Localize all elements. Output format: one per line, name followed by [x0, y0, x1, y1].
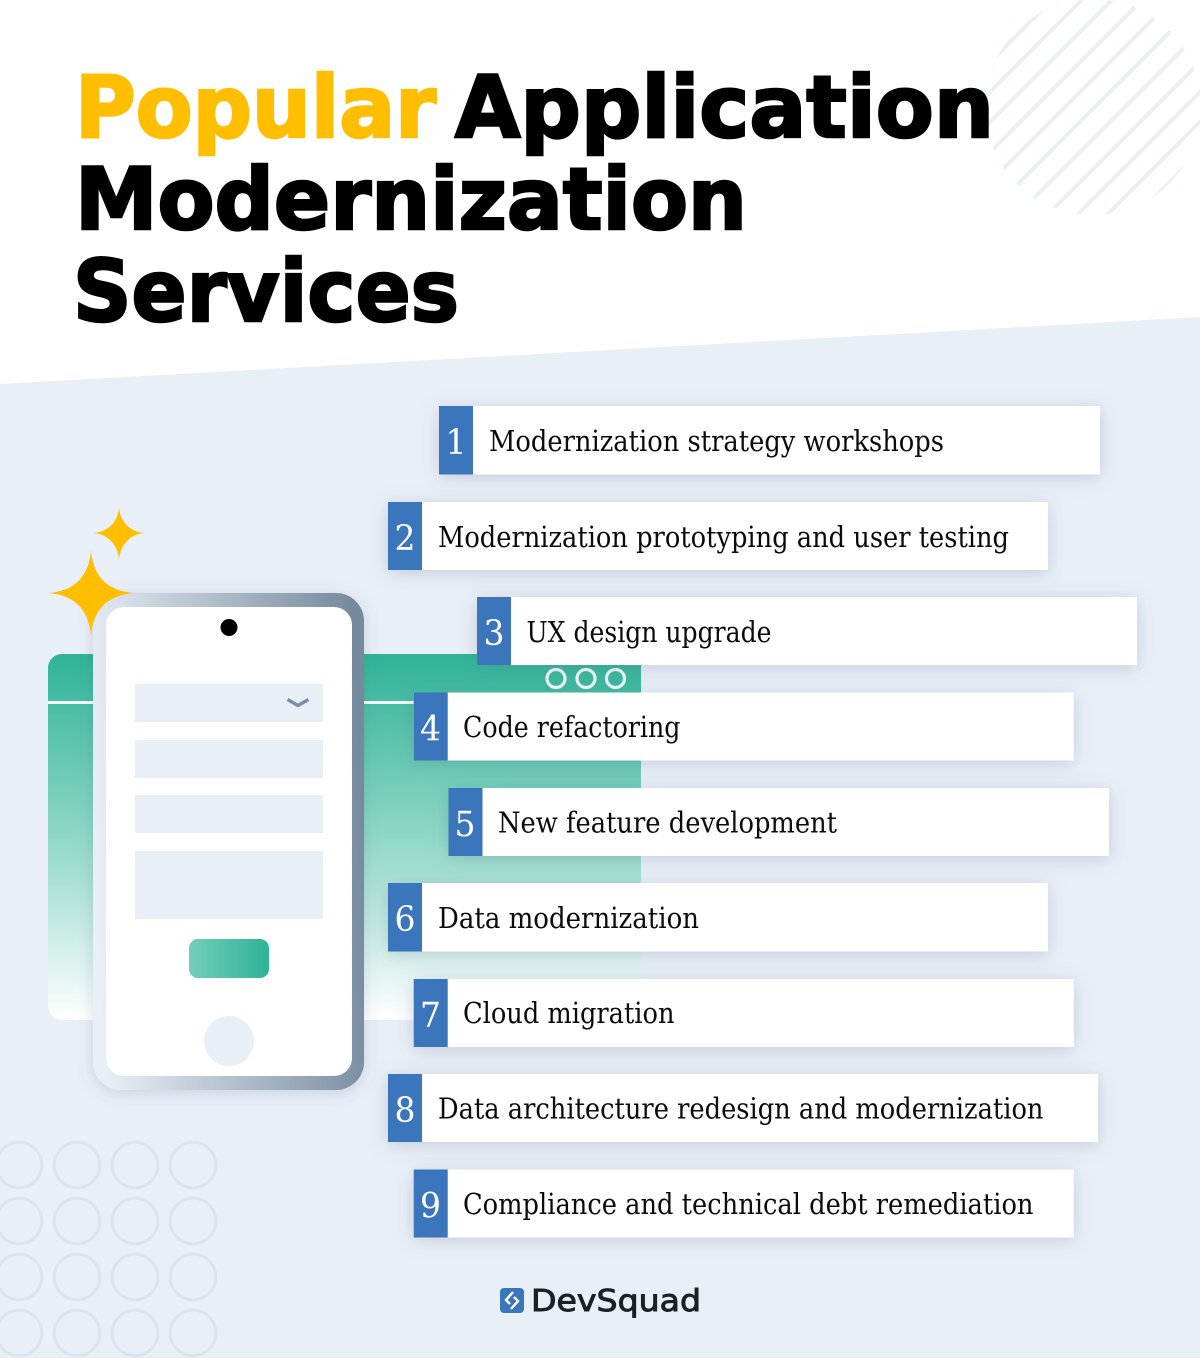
- list item 2: [388, 502, 1048, 570]
- list item 1: [439, 406, 1100, 474]
- list item 3: [477, 597, 1137, 665]
- list item 8: 8: [394, 1091, 416, 1131]
- dot grid decoration: [0, 1142, 216, 1356]
- list item 4: Code refactoring: [463, 710, 680, 744]
- list item 5: 5: [454, 805, 476, 845]
- list item 3: UX design upgrade: [526, 615, 772, 649]
- title: Modernization: [75, 150, 747, 250]
- background panel: [0, 317, 1200, 1358]
- striped circle decoration: [986, 0, 1200, 214]
- icon: large sparkle: [48, 550, 134, 636]
- list item 6: [388, 883, 1048, 952]
- title: Application: [455, 58, 994, 158]
- list item 8: Data architecture redesign and modernization: [438, 1092, 1044, 1126]
- list item 5: New feature development: [498, 806, 837, 840]
- browser window illustration: [48, 654, 641, 1020]
- list item 7: 7: [420, 996, 441, 1036]
- list item 9: 9: [420, 1186, 441, 1226]
- title: Popular: [75, 58, 437, 158]
- logo: DevSquad: DevSquad: [531, 1284, 701, 1319]
- list item 7: Cloud migration: [463, 996, 674, 1030]
- list item 4: 4: [420, 710, 441, 750]
- list item 9: [414, 1170, 1074, 1238]
- list item 2: Modernization prototyping and user testing: [438, 520, 1009, 554]
- list item 4: [414, 692, 1074, 760]
- list item 6: 6: [394, 900, 416, 940]
- list item 1: Modernization strategy workshops: [489, 424, 944, 458]
- list item 9: Compliance and technical debt remediation: [463, 1187, 1034, 1221]
- list item 2: 2: [394, 519, 416, 559]
- list item 5: [448, 788, 1109, 856]
- list item 6: Data modernization: [438, 901, 699, 935]
- list item 8: [388, 1074, 1098, 1142]
- list item 7: [414, 979, 1074, 1047]
- list item 3: 3: [484, 614, 504, 654]
- phone illustration: [93, 593, 364, 1090]
- title: [73, 58, 994, 342]
- icon: small sparkle: [93, 507, 145, 560]
- list item 1: 1: [446, 423, 466, 463]
- title: Services: [73, 242, 459, 342]
